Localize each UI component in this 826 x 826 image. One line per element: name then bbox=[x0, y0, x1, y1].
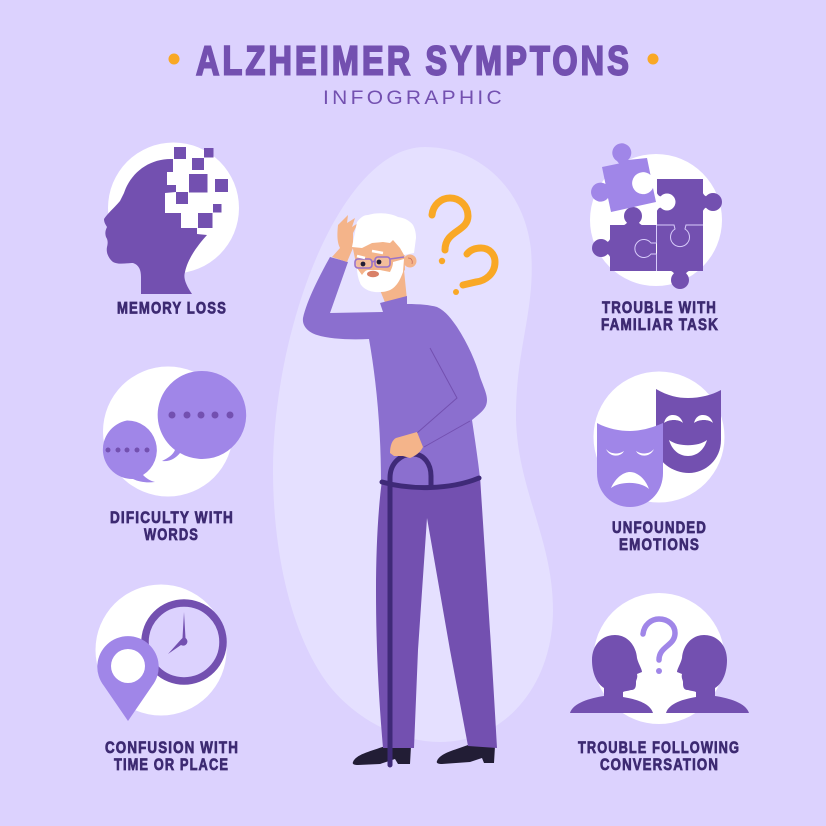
icon: puzzle pieces bbox=[590, 143, 722, 289]
icon: speech bubbles bbox=[103, 366, 246, 496]
label: DIFICULTY WITH bbox=[110, 509, 234, 527]
mouth bbox=[367, 271, 379, 277]
raised hand bbox=[332, 215, 358, 262]
label: EMOTIONS bbox=[619, 536, 700, 554]
background blob bbox=[273, 147, 553, 742]
eyes and eyebrows bbox=[357, 251, 383, 266]
label: UNFOUNDED bbox=[612, 519, 707, 537]
shoes bbox=[353, 745, 495, 765]
sleeve fold lines bbox=[417, 348, 470, 447]
trousers bbox=[376, 476, 497, 748]
label: TIME OR PLACE bbox=[114, 756, 229, 774]
panel: trouble following conversation bbox=[570, 593, 749, 774]
hand on cane bbox=[390, 432, 423, 458]
label: CONFUSION WITH bbox=[105, 739, 239, 757]
panel: confusion with time or place bbox=[96, 584, 239, 774]
face bbox=[352, 236, 405, 292]
sweater body and arms bbox=[303, 257, 487, 487]
beard bbox=[357, 259, 404, 292]
question marks bbox=[432, 198, 495, 295]
subtitle: INFOGRAPHIC bbox=[323, 88, 505, 109]
ear bbox=[404, 254, 416, 268]
panel: difficulty with words bbox=[103, 366, 246, 544]
title: ALZHEIMER SYMPTONS bbox=[196, 38, 632, 84]
icon: clock and map pin bbox=[96, 584, 226, 721]
panel: memory loss bbox=[104, 142, 239, 318]
hair bbox=[352, 213, 416, 255]
panel: unfounded emotions bbox=[594, 372, 724, 554]
figure: elderly man with cane bbox=[303, 213, 497, 765]
icon: theatre masks bbox=[594, 372, 724, 507]
glasses bbox=[355, 257, 404, 268]
icon: head with fading memory bbox=[104, 142, 239, 294]
label: TROUBLE FOLLOWING bbox=[578, 739, 740, 757]
label: TROUBLE WITH bbox=[602, 299, 717, 317]
neck bbox=[378, 270, 407, 310]
cane bbox=[382, 454, 479, 765]
panel: trouble with familiar task bbox=[590, 143, 722, 334]
label: CONVERSATION bbox=[600, 756, 719, 774]
label: WORDS bbox=[144, 526, 199, 544]
label: MEMORY LOSS bbox=[117, 300, 227, 318]
label: FAMILIAR TASK bbox=[601, 316, 719, 334]
icon: two heads with question mark bbox=[570, 593, 749, 724]
